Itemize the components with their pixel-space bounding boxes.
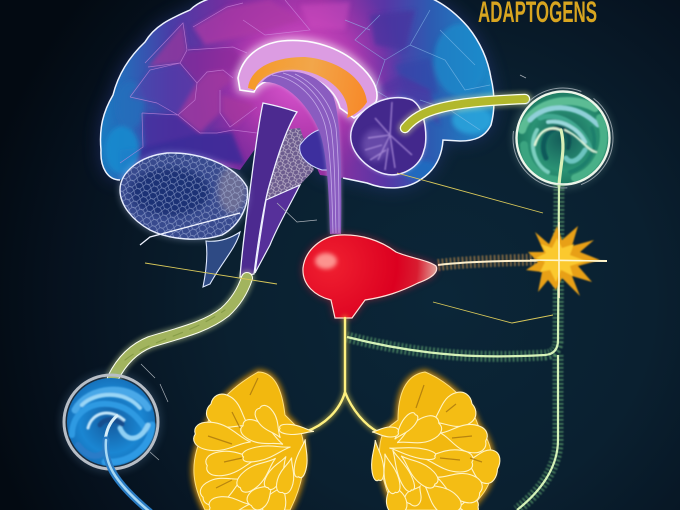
blue swirl circle <box>60 371 162 473</box>
cerebellum <box>115 150 255 245</box>
medulla tail <box>203 232 240 287</box>
star burst <box>526 222 607 298</box>
brain glow <box>100 0 494 188</box>
left yellow leaf cluster <box>192 372 314 510</box>
sulci lines <box>120 0 310 163</box>
purple fibre stalk <box>262 71 341 234</box>
green nerve vertical with bristles <box>347 185 559 510</box>
orange arc <box>248 57 367 118</box>
right yellow leaf cluster <box>369 372 502 510</box>
faint annotation ticks <box>141 75 526 460</box>
thin yellow leader lines <box>145 173 553 323</box>
orange nerve to star <box>438 259 607 265</box>
gyri shading <box>105 0 492 180</box>
blue inner fold <box>300 128 340 170</box>
green swirl circle <box>512 87 614 189</box>
brain cerebrum <box>100 0 494 190</box>
corpus callosum arch <box>238 40 377 118</box>
purple cluster nucleus <box>351 98 426 175</box>
brain stem purple columns <box>240 103 300 277</box>
green nerve to blue circle <box>113 278 247 378</box>
mesh thalamus region <box>262 128 314 203</box>
cerebellum band line <box>140 213 240 245</box>
yellow stalk to leaves <box>305 318 378 432</box>
red gland <box>303 235 437 318</box>
yellow-green nerve to green circle <box>405 99 525 128</box>
blue nerve tail <box>106 440 150 510</box>
right leaf veins <box>416 385 482 462</box>
left leaf veins <box>208 378 258 488</box>
